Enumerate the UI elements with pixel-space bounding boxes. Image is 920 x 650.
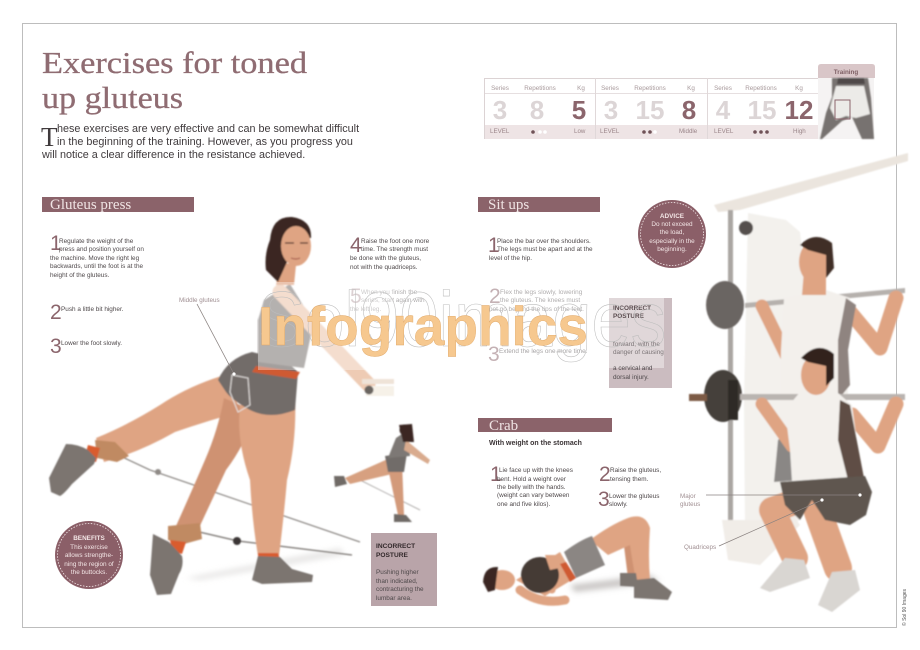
sit ups steps: [488, 234, 593, 366]
gluteus press steps 1 to 3: [50, 232, 144, 358]
arm right: [850, 298, 896, 348]
watermark: Sol90images outline: Sol90images: [258, 275, 666, 363]
neck: [802, 270, 826, 295]
high level column: 15: [748, 95, 776, 125]
hair: [266, 217, 311, 282]
middle level column: Repetitions: [634, 85, 666, 92]
label: quadriceps: [684, 498, 824, 551]
callout: incorrect posture sit ups: POSTURE: [613, 313, 645, 320]
gluteus press steps 4 and 5: 5: [350, 285, 362, 308]
intro text: will notice a clear difference in the resistance achieved.: [41, 149, 305, 161]
low level column: 5: [572, 95, 586, 125]
low level column: 8: [530, 95, 544, 125]
sit ups steps: Place the bar over the shoulders.: [497, 238, 591, 245]
training tab with thumbnail: [818, 64, 875, 139]
intro text: hese exercises are very effective and can be somewhat difficult: [57, 123, 359, 135]
arm left: [762, 306, 786, 355]
high level column: LEVEL: [714, 128, 734, 135]
band: [560, 562, 576, 582]
heading: gluteus press: Gluteus press: [50, 197, 131, 213]
callout: incorrect posture sit ups: danger of causing: [613, 349, 664, 356]
gluteus press steps 4 and 5: series, start again with: [361, 297, 425, 304]
heading: gluteus press: [42, 197, 194, 213]
badge: benefits: the buttocks.: [71, 569, 107, 576]
watermark: Infographics: Infographics: [258, 295, 588, 357]
high level column: Kg: [795, 85, 803, 92]
callout: incorrect posture: Pushing higher: [376, 569, 420, 576]
low level column: Repetitions: [524, 85, 556, 92]
shorts: [564, 536, 605, 578]
callout: incorrect posture: INCORRECT: [376, 543, 415, 550]
head: [489, 570, 515, 590]
label: quadriceps: Quadriceps: [684, 544, 716, 551]
sit ups steps: 1: [488, 234, 500, 257]
middle level column: 15: [636, 95, 664, 125]
shoes: [620, 573, 638, 587]
badge: advice: [638, 200, 706, 268]
badge: advice: ADVICE: [660, 213, 685, 220]
guide pole: [728, 210, 733, 520]
gluteus press steps 1 to 3: Lower the foot slowly.: [61, 340, 122, 347]
label: major gluteus: [680, 493, 862, 508]
middle level column: Middle: [679, 128, 698, 135]
middle level column: [600, 85, 698, 135]
high level column: 4: [716, 95, 731, 125]
lower man: [760, 348, 896, 612]
sit ups steps: Extend the legs one more time.: [499, 348, 588, 355]
sit ups steps: The legs must be apart and at the: [497, 246, 593, 253]
low level column: [490, 85, 586, 135]
high level column: High: [793, 128, 806, 135]
gluteus press steps 4 and 5: When you finish the: [361, 289, 418, 296]
heading: sit ups: Sit ups: [488, 197, 529, 213]
intro text: [41, 122, 359, 161]
crab steps: slowly.: [609, 501, 628, 508]
low level column: 3: [493, 95, 507, 125]
ankle cuffs: [95, 440, 202, 544]
label: major gluteus: Major: [680, 493, 696, 500]
shorts: [780, 476, 872, 525]
high level column: 12: [785, 95, 813, 125]
callout: incorrect posture: [371, 533, 437, 606]
copyright: © Sol 90 Images: [901, 588, 908, 626]
badge: advice: Do not exceed: [651, 221, 693, 228]
near leg: [590, 516, 650, 580]
floor shadow: [185, 548, 345, 580]
label: major gluteus: gluteus: [680, 501, 700, 508]
small figure: incorrect posture: [334, 424, 430, 522]
neck: [276, 262, 296, 285]
intro text: T: [41, 122, 58, 152]
cables: [118, 455, 360, 555]
gluteus press steps 1 to 3: press and position yourself on: [59, 246, 144, 253]
upper plate: [706, 281, 744, 329]
machine top bar: [714, 153, 908, 212]
heading: crab: Crab: [489, 418, 518, 434]
arm: [520, 590, 565, 601]
middle level column: Kg: [687, 85, 695, 92]
title: Exercises for toned: [42, 45, 308, 80]
middle level column: 8: [682, 95, 696, 125]
sit ups steps: 3: [488, 343, 500, 366]
lower bar: [689, 394, 707, 401]
sit ups steps: level of the hip.: [489, 255, 532, 262]
arm: [280, 292, 368, 384]
back legs shadow: [774, 430, 800, 482]
weight: [521, 557, 559, 593]
shadow: [570, 575, 660, 592]
left leg: [772, 500, 800, 558]
label: middle gluteus: Middle gluteus: [179, 297, 220, 304]
badge: benefits: [55, 521, 123, 589]
callout: incorrect posture: than indicated,: [376, 578, 418, 585]
crab steps: [490, 463, 661, 511]
heading: crab: [478, 418, 612, 434]
sit ups steps: 2: [489, 285, 501, 308]
callout: incorrect posture sit ups: dorsal injury.: [613, 374, 649, 381]
high level column: Series: [714, 85, 732, 92]
sit ups steps: not go beyond the tips of the feet.: [489, 306, 584, 313]
badge: advice: especially in the: [649, 238, 695, 245]
gluteus press steps 4 and 5: [350, 234, 430, 313]
crab figure: [483, 516, 672, 601]
face: [281, 226, 311, 266]
callout: incorrect posture: lumbar area.: [376, 595, 412, 602]
gluteus press steps 1 to 3: backwards, until the foot is at the: [50, 263, 144, 270]
waist band: [252, 366, 300, 379]
low level column: Kg: [577, 85, 585, 92]
badge: advice: the load,: [660, 229, 684, 236]
crab steps: (weight can vary between: [497, 492, 570, 499]
shoes: [760, 558, 810, 592]
high level column: [714, 85, 813, 135]
gluteus press steps 4 and 5: time. The strength must: [361, 246, 428, 253]
sit ups steps: Flex the legs slowly, lowering: [500, 289, 583, 296]
low level column: Series: [491, 85, 509, 92]
callout: incorrect posture: contracturing the: [376, 586, 424, 593]
crab subheading: With weight on the stomach: [489, 440, 582, 447]
badge: benefits: ning the region of: [64, 561, 114, 568]
lower plate: [704, 370, 742, 422]
head: [801, 355, 831, 395]
far leg: [622, 520, 640, 578]
crab steps: the belly with the hands.: [497, 484, 566, 491]
callout: incorrect posture: POSTURE: [376, 552, 408, 559]
torso: [780, 290, 850, 420]
training tab with thumbnail: Training: [834, 69, 858, 76]
right leg: [818, 505, 848, 568]
badge: benefits: BENEFITS: [73, 535, 106, 542]
gluteus press steps 4 and 5: not with the quadriceps.: [350, 264, 418, 271]
heading: sit ups: [478, 197, 600, 213]
callout: incorrect posture sit ups: a cervical and: [613, 365, 653, 372]
main figure: woman on gluteus press: [49, 217, 394, 595]
gluteus press steps 1 to 3: 3: [50, 335, 62, 358]
badge: advice: beginning.: [657, 246, 687, 253]
label: middle gluteus: [179, 297, 236, 376]
middle level column: LEVEL: [600, 128, 620, 135]
crab steps: 1: [490, 463, 502, 486]
shirt: [785, 392, 862, 482]
shoes: [49, 444, 313, 595]
crab steps: bent. Hold a weight over: [497, 476, 567, 483]
callout: incorrect posture sit ups: forward, with the: [613, 341, 660, 348]
gluteus press steps 4 and 5: 4: [350, 234, 362, 257]
badge: benefits: allows strengthe-: [65, 552, 113, 559]
low level column: LEVEL: [490, 128, 510, 135]
gluteus press steps 1 to 3: Regulate the weight of the: [59, 238, 134, 245]
machine and men figures: [689, 153, 908, 612]
watermark veil: [258, 282, 393, 370]
front arm: [852, 404, 896, 446]
machine column: [744, 213, 806, 528]
crab steps: Lower the gluteus: [609, 493, 659, 500]
top: [258, 284, 312, 368]
gluteus press steps 1 to 3: Push a little bit higher.: [61, 306, 124, 313]
title: up gluteus: [42, 80, 183, 115]
crab steps: tensing them.: [610, 476, 649, 483]
intro text: in the beginning of the training. However, as you progress you: [57, 136, 353, 148]
upper man: [745, 237, 905, 420]
gluteus press steps 4 and 5: Raise the foot one more: [361, 238, 430, 245]
callout: incorrect posture sit ups: [609, 298, 672, 388]
gluteus press steps 1 to 3: 2: [50, 301, 62, 324]
sit ups steps: the gluteus. The knees must: [500, 297, 580, 304]
gluteus press steps 1 to 3: height of the gluteus.: [50, 272, 110, 279]
middle level column: Series: [601, 85, 619, 92]
gluteus press steps 4 and 5: the left leg.: [350, 306, 381, 313]
title: [42, 45, 308, 115]
torso: [516, 552, 575, 596]
crab steps: Raise the gluteus,: [610, 467, 661, 474]
gluteus press steps 1 to 3: 1: [50, 232, 62, 255]
gluteus press steps 4 and 5: be done with the gluteus,: [350, 255, 421, 262]
callout: incorrect posture sit ups: INCORRECT: [613, 305, 651, 312]
crab steps: 2: [599, 463, 611, 486]
badge: benefits: This exercise: [70, 544, 108, 551]
gluteus overlay: [230, 375, 250, 412]
back arm: [762, 404, 792, 446]
gluteus press steps 1 to 3: the machine. Move the right leg: [50, 255, 140, 262]
training table: [484, 78, 818, 139]
head: [799, 241, 829, 283]
standing leg: [239, 395, 295, 556]
crab steps: 3: [598, 488, 610, 511]
crab steps: Lie face up with the knees: [499, 467, 573, 474]
raised leg: [96, 374, 240, 462]
shorts: [218, 352, 298, 415]
low level column: Low: [574, 128, 586, 135]
upper bar: [745, 288, 905, 308]
back leg: [176, 398, 256, 530]
middle level column: 3: [604, 95, 618, 125]
high level column: Repetitions: [745, 85, 777, 92]
crab steps: one and five kilos).: [497, 501, 551, 508]
handle: [362, 379, 394, 396]
